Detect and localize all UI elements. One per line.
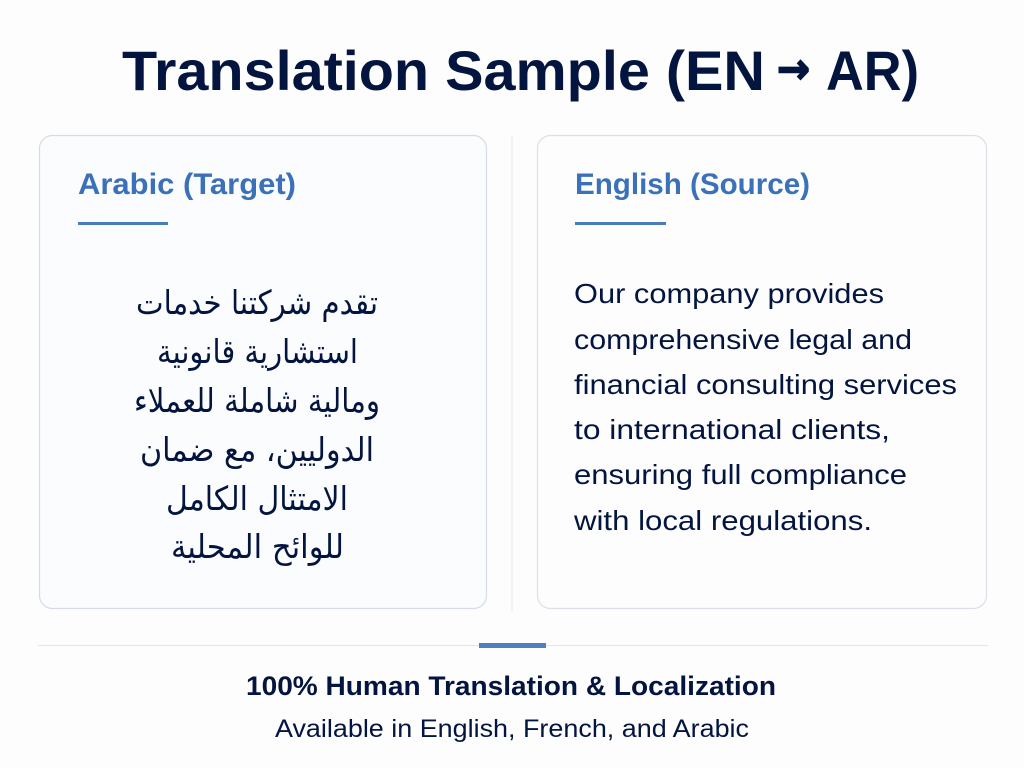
English text block: Our company provides xyxy=(574,278,884,309)
Arabic text block: ومالية شاملة للعملاء xyxy=(134,381,380,420)
English text block: financial consulting services xyxy=(574,369,957,400)
English text block xyxy=(573,278,957,536)
Arabic text block: تقدم شركتنا خدمات xyxy=(136,283,378,322)
English text block: with local regulations. xyxy=(573,505,872,536)
footer divider xyxy=(38,645,988,646)
panel background xyxy=(538,136,986,608)
English text block: ensuring full compliance xyxy=(574,459,907,490)
English text block: comprehensive legal and xyxy=(574,324,912,355)
center divider xyxy=(512,135,513,611)
panel heading: Arabic (Target) xyxy=(78,168,296,201)
footer subtext: Available in English, French, and Arabic xyxy=(275,715,749,743)
panel heading: English (Source) xyxy=(575,168,810,201)
footer heading: 100% Human Translation & Localization xyxy=(246,671,776,701)
English text block: to international clients, xyxy=(574,414,890,445)
heading underline xyxy=(575,222,666,225)
title: AR) xyxy=(826,39,919,102)
Arabic text block xyxy=(134,283,380,566)
footer accent bar xyxy=(479,643,546,648)
Arabic text block: استشارية قانونية xyxy=(157,332,358,371)
title: → xyxy=(777,44,810,93)
Arabic text block: الدوليين، مع ضمان xyxy=(140,430,374,469)
panel: English source xyxy=(538,136,986,608)
Arabic text block: الامتثال الكامل xyxy=(166,479,348,518)
Arabic text block: للوائح المحلية xyxy=(171,527,344,566)
panel background xyxy=(40,136,486,608)
title: Translation Sample (EN xyxy=(122,39,765,102)
heading underline xyxy=(78,222,168,225)
panel: Arabic target xyxy=(40,136,486,608)
